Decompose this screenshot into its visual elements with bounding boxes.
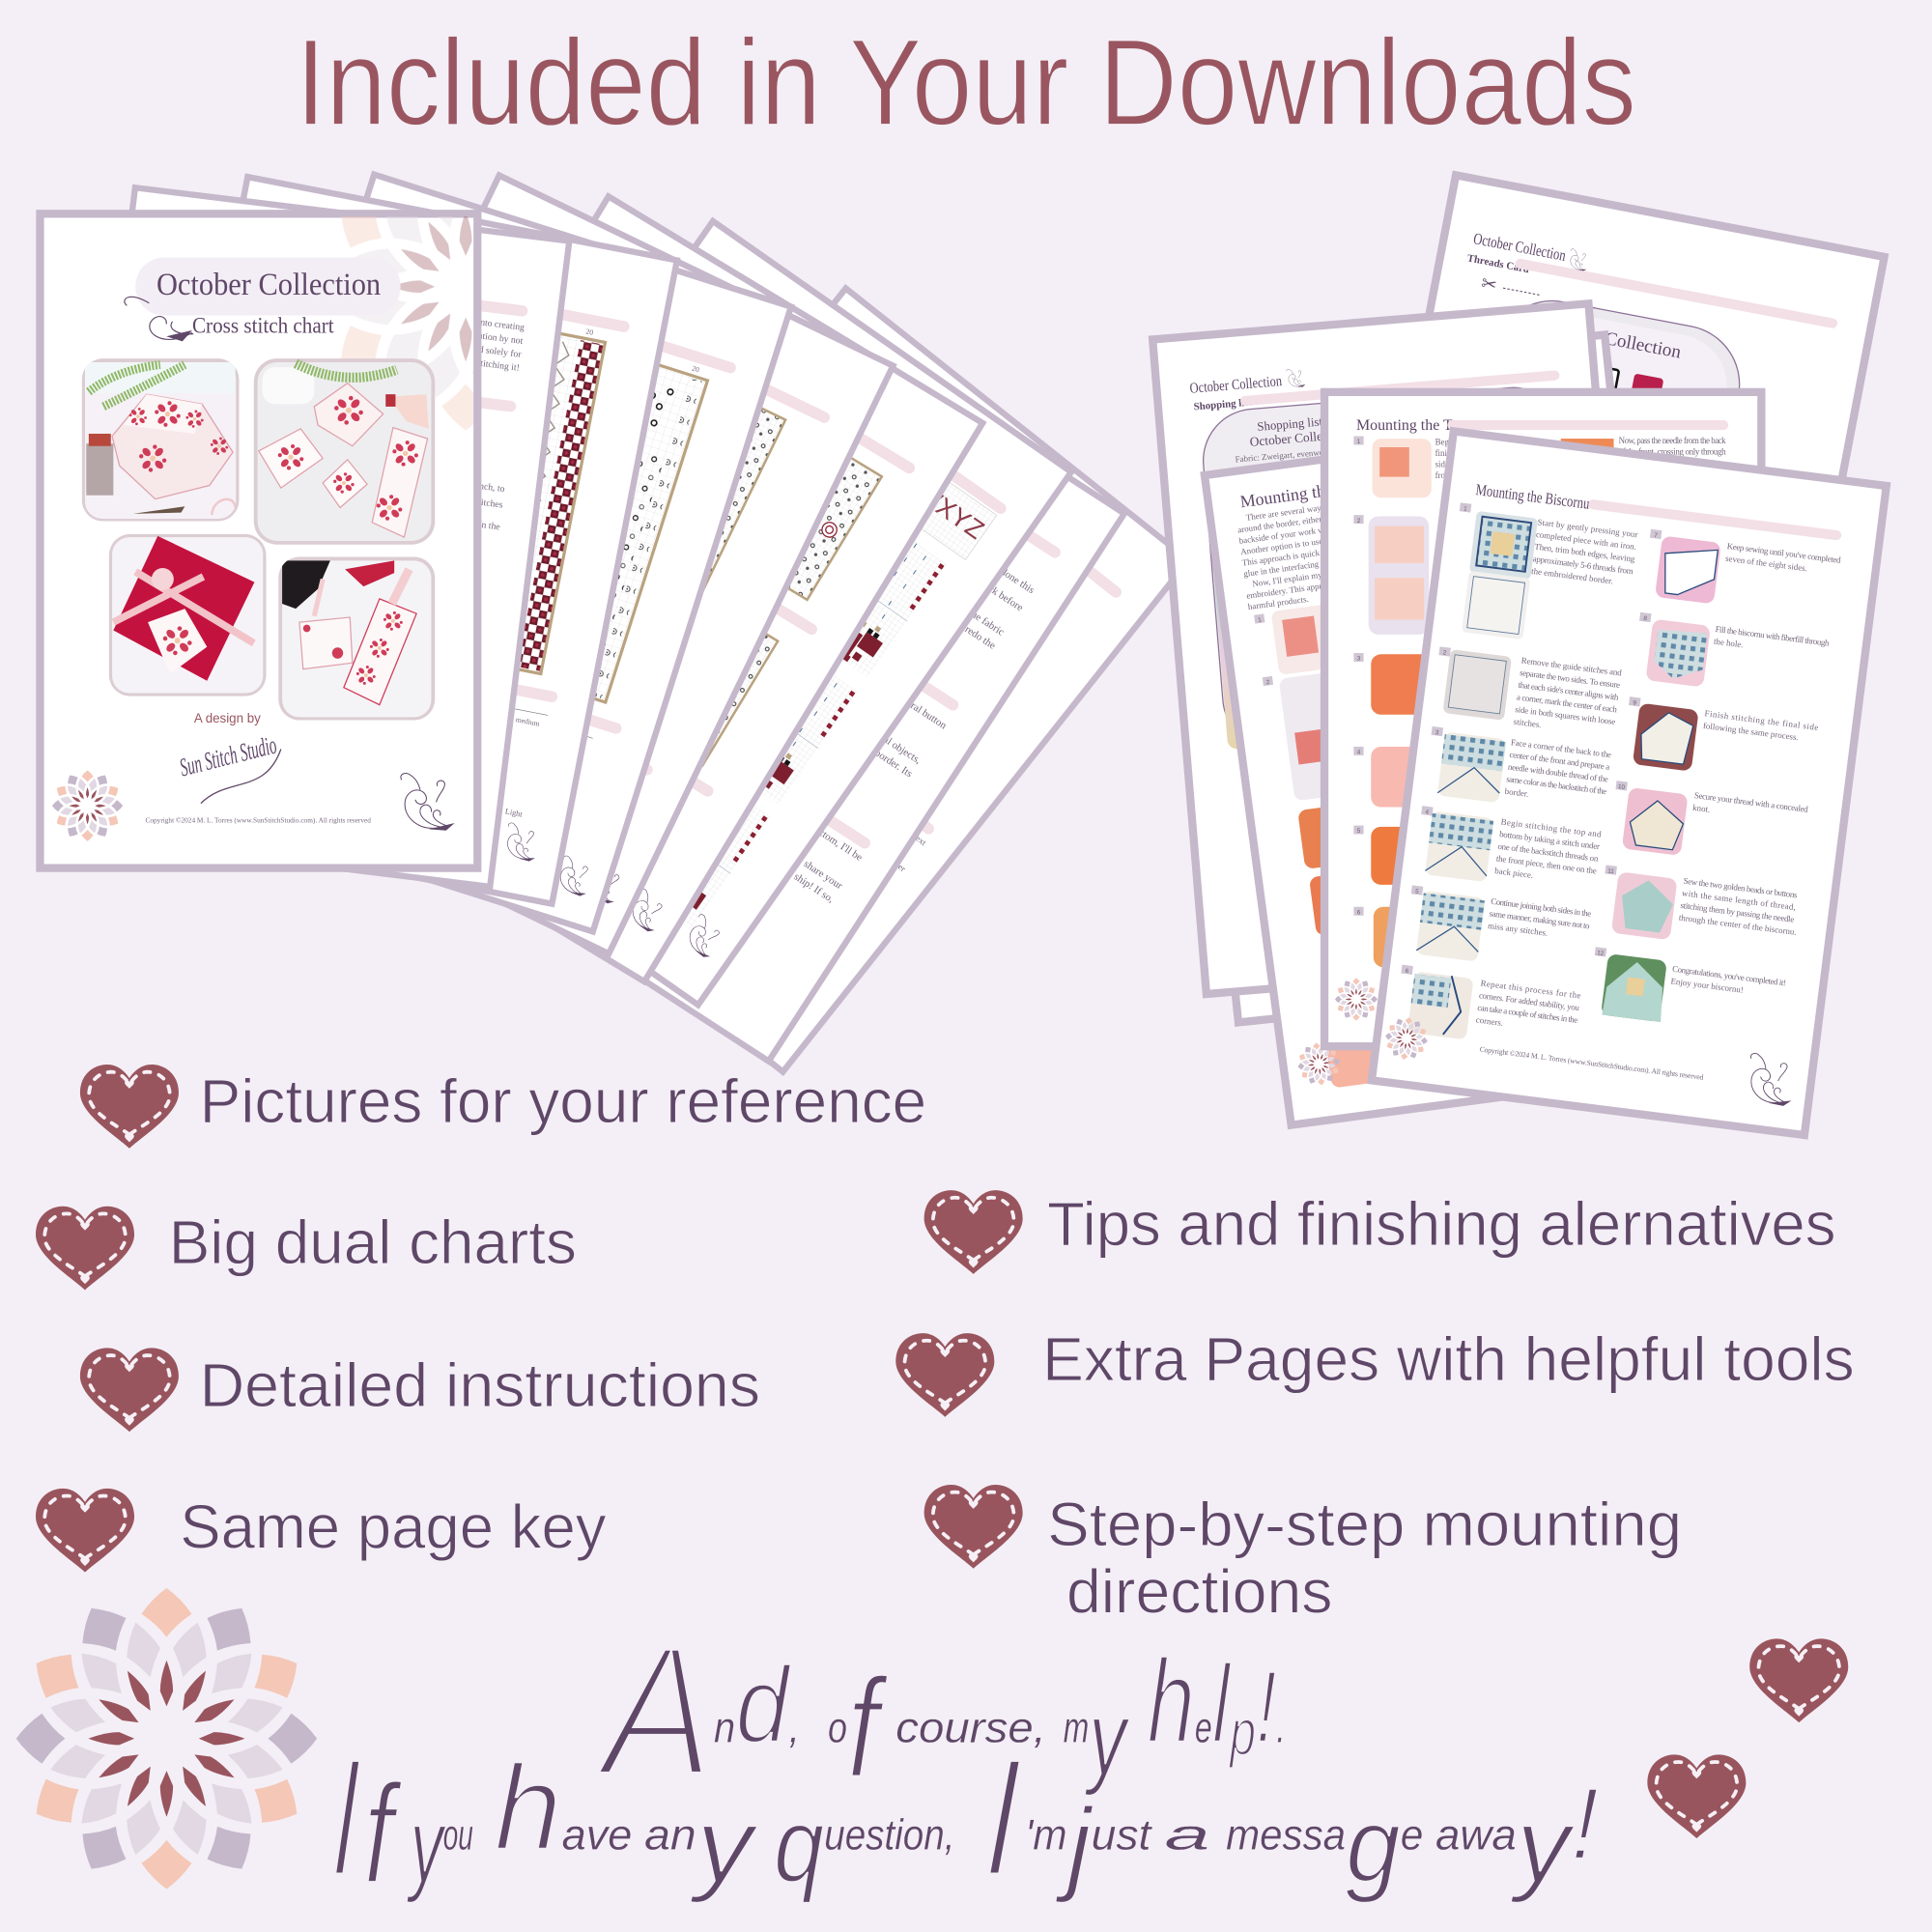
script message: line one: p	[1229, 1696, 1256, 1769]
page: shopping list: Fabric: Zweigart, evenweave 25 count	[1235, 443, 1368, 465]
left column text: corners. For added stability, you	[1478, 990, 1580, 1012]
right column text	[1670, 541, 1844, 1001]
right column text: stitching them by passing the needle	[1680, 900, 1795, 924]
right column text: Keep sewing until you've completed	[1726, 541, 1842, 565]
page 8: text page	[440, 288, 1188, 1072]
right column text: with the same length of thread,	[1682, 888, 1796, 912]
script message: line two: uestion,	[824, 1812, 955, 1860]
script message: line two: e	[1401, 1812, 1423, 1860]
page 6: alphabet and tag charts	[340, 221, 1071, 1005]
right column text: Fill the biscornu with fiberfill through	[1715, 624, 1831, 648]
threads page heading: Threads Card	[1466, 252, 1530, 275]
page 1: intro text page: your stitches	[455, 495, 503, 511]
page 7: text page: border. Its	[872, 747, 915, 780]
feature: tips: Tips and finishing alernatives	[1047, 1189, 1836, 1259]
backing page intro text: There are several ways to finish	[1245, 498, 1356, 523]
page 7: text page: bottom, I'll be	[809, 822, 865, 864]
cover page	[40, 143, 610, 868]
script message: line two: I	[980, 1720, 1025, 1914]
backing page intro text: glue in the interfacing	[1243, 559, 1320, 579]
left column text: bottom by taking a stitch under	[1499, 829, 1601, 851]
right column text: seven of the eight sides.	[1725, 554, 1808, 573]
faded mandala	[341, 216, 473, 431]
swirl	[1746, 1053, 1797, 1107]
script message: line two: ou	[443, 1812, 473, 1860]
left column text: one of the backstitch threads on	[1497, 841, 1600, 864]
flourish	[125, 297, 193, 341]
left column text: Repeat this process for the	[1480, 979, 1581, 1001]
script message: line one: !	[1256, 1649, 1276, 1765]
feature: step-by-step: Step-by-step mounting	[1047, 1490, 1682, 1559]
script message: line one: n	[714, 1705, 735, 1752]
page 1: intro text page: stitching it!	[476, 357, 520, 374]
tag page text: Now, pass the needle from the back	[1619, 436, 1726, 445]
backing page intro text: harmful products.	[1247, 594, 1309, 611]
backing page intro text: embroidery. This approach	[1246, 579, 1339, 601]
feature: big dual charts: Big dual charts	[169, 1208, 577, 1277]
page 1: intro text page: intended solely for	[451, 341, 523, 360]
backing page photos: 2	[1265, 679, 1270, 686]
right column text: following the same process.	[1702, 721, 1799, 742]
script message: line two: messa	[1226, 1812, 1346, 1860]
backing page intro text: around the border, either by hand	[1237, 510, 1352, 534]
left column text: border.	[1504, 786, 1529, 799]
shopping page heading: October Collection	[1189, 373, 1283, 397]
page 1: intro text page: thread	[448, 621, 473, 635]
page 1: intro text page	[56, 187, 569, 887]
tag page photos: 1	[1357, 439, 1361, 445]
left column photos: 1	[1463, 505, 1468, 513]
design by: A design by	[194, 710, 261, 725]
page 1: intro text page: application by not	[455, 327, 524, 347]
page 2: chart page with checker border: Light	[504, 807, 524, 819]
page 1: intro text page: picture	[449, 594, 476, 608]
backing page intro text: This approach is quick	[1241, 548, 1321, 568]
right column text: Sew the two golden beads or buttons	[1683, 876, 1799, 899]
cover subtitle: Cross stitch chart	[192, 313, 334, 337]
copyright: Copyright ©2024 M. L. Torres (www.SunStitchStudio.com). All rights reserved	[1479, 1045, 1704, 1082]
title: Included in Your Downloads	[296, 14, 1636, 152]
script message: line one: A	[594, 1606, 714, 1816]
right column photos: 8	[1643, 615, 1648, 622]
page: mounting the biscornu	[1372, 431, 1887, 1135]
photo: gift box with ribbon	[109, 534, 267, 696]
left column text: completed piece with an iron.	[1535, 529, 1636, 552]
tag page text: fini	[1435, 448, 1447, 458]
backing page photos: 1	[1258, 616, 1263, 624]
left column text: same manner, making sure not to	[1489, 908, 1591, 930]
right column text: through the center of the biscornu.	[1678, 913, 1797, 937]
script message: line two: an	[644, 1812, 696, 1860]
left column text: the embroidered border.	[1531, 566, 1614, 586]
page 7: text page: natural button	[894, 690, 949, 732]
tag page photos: 2	[1357, 518, 1361, 525]
left column text: that each side's center aligns with	[1518, 680, 1620, 702]
feature: step-by-step: directions	[1066, 1557, 1332, 1627]
script message: line one: o	[828, 1705, 847, 1752]
feature: same page key: Same page key	[180, 1492, 607, 1562]
left column text: separate the two sides. To ensure	[1520, 668, 1621, 690]
script message: line one: y	[1084, 1680, 1130, 1797]
icon: heart lower right	[1647, 1754, 1746, 1838]
threads page heading: October Collection	[1472, 229, 1568, 265]
left column text	[1474, 517, 1640, 1037]
feature: step-by-step	[924, 1485, 1682, 1627]
left column photos: 5	[1415, 889, 1419, 895]
script message: line one	[594, 1606, 1285, 1816]
script message: line two: j	[1054, 1787, 1094, 1904]
page: shopping list: Re	[1245, 689, 1259, 701]
script message: line one: f	[847, 1649, 889, 1807]
script message: line one: d,	[735, 1644, 801, 1766]
page 7: text page: redo the	[963, 623, 998, 652]
page 7: text page: share your	[802, 858, 845, 892]
left column text: Begin stitching the top and	[1500, 816, 1603, 839]
tag page photos: 3	[1357, 656, 1361, 663]
left column text: Face a corner of the back to the	[1511, 737, 1612, 759]
right column photos: 10	[1618, 783, 1626, 791]
feature: detailed instructions: Detailed instructions	[200, 1350, 760, 1420]
right column text: Finish stitching the final side	[1704, 708, 1819, 732]
tag page heading: Mounting the Tag	[1356, 417, 1466, 434]
page 7: text page: ship! If so,	[792, 871, 837, 905]
right column photos: 11	[1607, 867, 1615, 875]
right column photos: 9	[1633, 699, 1637, 707]
small mandala	[1382, 1014, 1431, 1063]
script message: line one: .	[1276, 1705, 1285, 1752]
shopping page heading	[1189, 373, 1284, 413]
page 7: text page: the fabric	[967, 607, 1007, 639]
page 7: text page	[402, 275, 1124, 1062]
left column text: Start by gently pressing your	[1537, 517, 1638, 539]
left column text: a corner, mark the center of each	[1516, 692, 1618, 714]
photo: set of finishes	[254, 358, 435, 545]
page 1: intro text page: poured into creating	[449, 314, 526, 333]
feature: extra pages	[895, 1324, 1855, 1417]
left column text: needle with double thread of the	[1507, 762, 1608, 784]
script message: line two: awa	[1435, 1812, 1517, 1860]
script message: line two: I	[327, 1720, 363, 1914]
left column text: center of the front and prepare a	[1509, 750, 1610, 772]
feature: extra pages: Extra Pages with helpful tools	[1042, 1324, 1855, 1394]
page 4: chart page	[215, 176, 893, 953]
backing page intro text	[1236, 498, 1368, 611]
tag page text	[1435, 436, 1726, 480]
left column photos: 6	[1405, 968, 1409, 975]
script message: line one: hel	[1148, 1635, 1236, 1769]
right column photos: 7	[1654, 532, 1659, 539]
page 8: text page: over	[890, 857, 908, 873]
small mandala	[1295, 1040, 1343, 1088]
feature: same page key	[36, 1489, 607, 1573]
left column text: approximately 5-6 threads from	[1532, 554, 1634, 576]
copyright: Copyright ©2024 M. L. Torres (www.SunStitchStudio.com). All rights reserved	[146, 815, 371, 824]
left column photos: 4	[1425, 809, 1430, 816]
left column photos: 3	[1435, 729, 1439, 736]
page 1: intro text page: each inch, to	[457, 478, 505, 495]
script message: line one: m	[1064, 1705, 1089, 1752]
backing page intro text: Now, I'll explain my	[1252, 570, 1323, 588]
tag page photos: 6	[1357, 909, 1361, 916]
left column text: can take a couple of stitches in the	[1477, 1003, 1578, 1025]
feature: big dual charts	[36, 1207, 577, 1290]
page: shopping list: October Collection	[1249, 427, 1350, 449]
backing page intro text: backside of your work visible	[1238, 523, 1341, 546]
script message: line two: y	[689, 1787, 759, 1904]
signature	[177, 730, 281, 804]
page 3: chart page with ring symbols: 20	[691, 364, 700, 374]
icon: heart upper right	[1749, 1638, 1848, 1722]
page 2: chart page with checker border: 20	[585, 327, 594, 337]
page 1: intro text page: shows	[450, 608, 475, 621]
page 1: intro text page: over	[454, 636, 472, 648]
right column text: Secure your thread with a concealed	[1693, 790, 1809, 814]
page 7: text page: work before	[977, 577, 1025, 613]
page fragment under shopping list	[1171, 335, 1672, 1025]
script message: line two: y	[406, 1787, 446, 1904]
right column text: knot.	[1692, 803, 1711, 814]
script message: line two	[327, 1720, 1600, 1914]
page 2: chart page with checker border	[123, 177, 677, 904]
backing page intro text: Another option is to use	[1240, 536, 1323, 556]
photo: tag and bookmark	[278, 557, 435, 721]
page 5: chart page	[270, 196, 982, 981]
script message: line two: !	[1570, 1766, 1600, 1882]
tag page text: side	[1435, 459, 1449, 469]
biscornu page heading: Mounting the Biscornu	[1475, 480, 1591, 513]
page 7: text page: done this	[998, 566, 1037, 596]
left column text: Then, trim both edges, leaving	[1534, 542, 1635, 564]
script message: line two: a	[1164, 1812, 1210, 1860]
tag page text: Begin	[1435, 437, 1456, 446]
fan of chart pages	[56, 175, 1188, 1072]
swirl	[401, 773, 455, 831]
cover title: October Collection	[156, 267, 382, 302]
script message: line two: ust	[1092, 1812, 1152, 1860]
backing page photos	[1254, 599, 1433, 1091]
script message: line two: g	[1346, 1787, 1401, 1904]
left column photos	[1391, 502, 1539, 1040]
threads page heading	[1466, 229, 1568, 282]
large mandala	[16, 1588, 317, 1889]
script message: line two: have	[494, 1742, 632, 1876]
photo: biscornu with fern	[82, 358, 239, 522]
left column text: Remove the guide stitches and	[1520, 655, 1623, 678]
feature: pictures: Pictures for your reference	[200, 1066, 926, 1136]
tag page photos	[1353, 437, 1435, 967]
tag page text: from	[1435, 470, 1452, 480]
left column text: Continue joining both sides in the	[1491, 896, 1592, 919]
page 6: alphabet and tag charts: WXYZ	[910, 477, 989, 545]
left column text: stitches.	[1513, 717, 1542, 729]
script message: line two: q	[774, 1787, 824, 1904]
page 7: text page: al objects,	[881, 733, 923, 767]
right column text: the hole.	[1713, 637, 1744, 649]
page: shopping list: Shopping list	[1257, 414, 1323, 434]
page: mounting the backing	[1205, 417, 1725, 1125]
cover mandala	[52, 771, 123, 841]
script message: line two: y	[1510, 1787, 1576, 1904]
page: threads card: October Collection	[1540, 317, 1683, 363]
left column photos: 2	[1442, 649, 1447, 657]
right column photos: 12	[1597, 950, 1605, 957]
tag page photos: 5	[1357, 828, 1361, 835]
page 3: chart page with ring symbols	[176, 175, 791, 931]
page: threads card: ✂	[1479, 271, 1499, 297]
left column text: same color as the backstitch of the	[1506, 774, 1607, 796]
left column text: corners.	[1475, 1014, 1504, 1028]
script message: line one: course,	[895, 1705, 1046, 1752]
script message: line two: f	[363, 1755, 403, 1914]
page: shopping list	[1152, 303, 1642, 994]
tag page photos: 4	[1357, 750, 1361, 756]
signature: Sun Stitch Studio	[177, 730, 279, 781]
right column text: Enjoy your biscornu!	[1670, 976, 1744, 995]
left column text: back piece.	[1494, 866, 1534, 880]
right column photos	[1587, 528, 1721, 1022]
right column text: Congratulations, you've completed it!	[1672, 964, 1787, 988]
feature: detailed instructions	[80, 1348, 760, 1432]
tag page text: of the front, crossing only through	[1619, 447, 1726, 457]
backing page heading: Mounting the backing	[1238, 472, 1392, 511]
page: mounting the tag	[1324, 392, 1761, 1046]
left column text: miss any stitches.	[1488, 921, 1548, 938]
left column text: side in both squares with loose	[1515, 704, 1616, 726]
page: threads card	[1334, 175, 1885, 895]
script message: line two: 'm	[1025, 1812, 1067, 1860]
cover title pill	[135, 258, 401, 316]
left column text: the front piece, then one on the	[1495, 853, 1597, 875]
page 1: intro text page: In the	[478, 520, 500, 532]
shopping page heading: Shopping list	[1193, 396, 1253, 412]
page 2: chart page with checker border: medium	[515, 715, 541, 728]
small mandala	[1335, 978, 1378, 1020]
page 8: text page: next	[911, 831, 928, 848]
